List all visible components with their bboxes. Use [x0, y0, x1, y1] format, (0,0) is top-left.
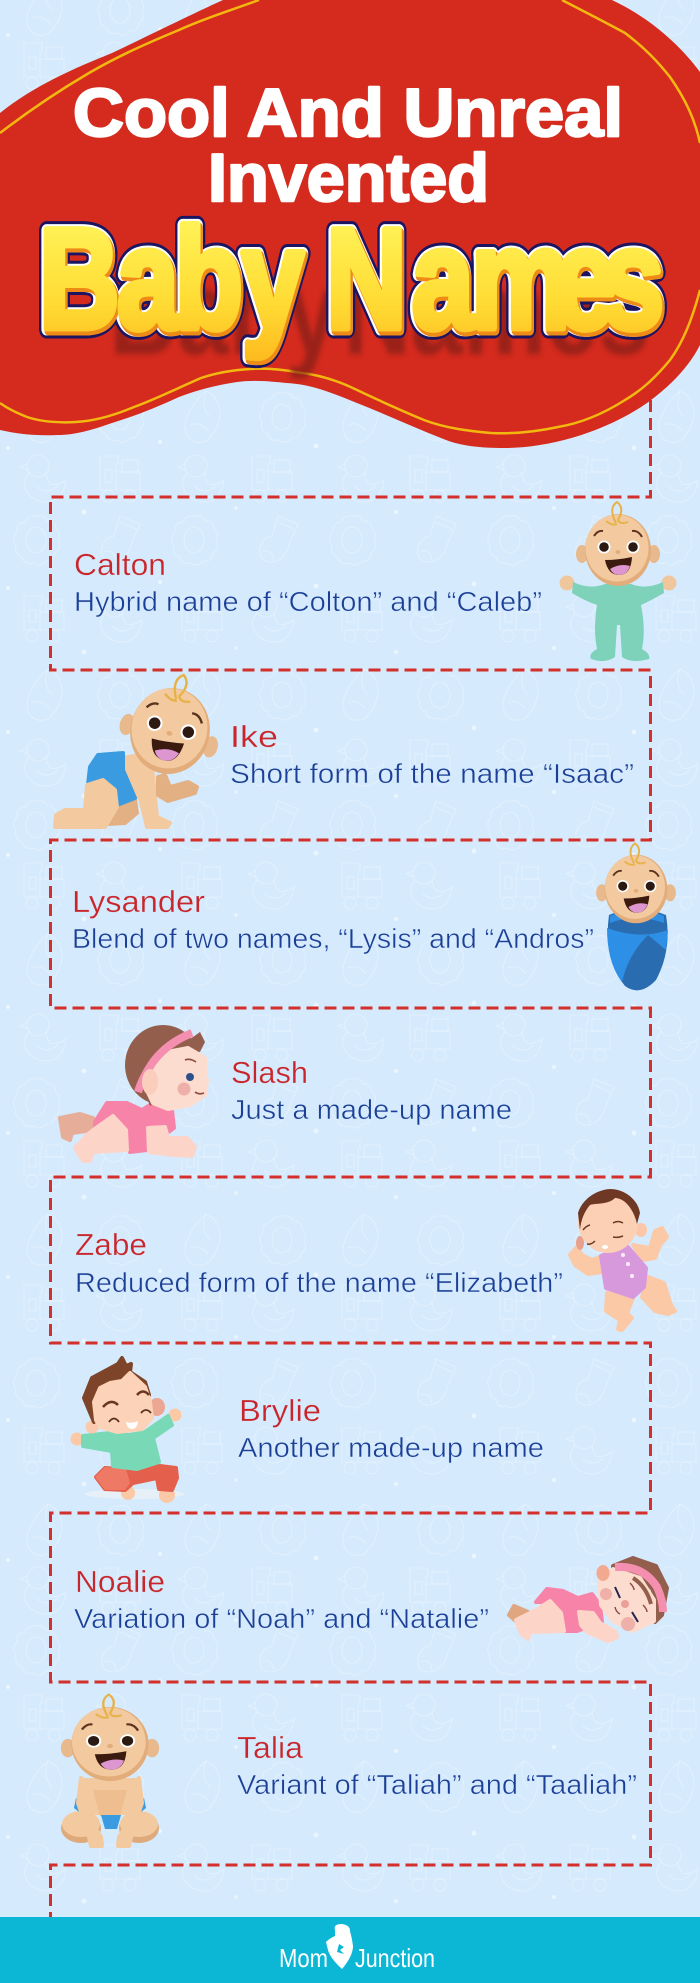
entry: Noalie: Noalie [75, 1564, 165, 1599]
icon: sleeping baby girl in pink [509, 1558, 667, 1641]
footer bar [0, 1917, 700, 1983]
entry: Lysander: Lysander [72, 884, 205, 919]
entry: Calton [74, 547, 542, 617]
title: Baby Names: m [471, 200, 570, 359]
title: Cool And Unreal Invented: Cool And Unreal [73, 75, 623, 151]
title: Baby Names: s [602, 201, 664, 360]
entry: Zabe [75, 1227, 563, 1298]
title: Baby Names: m [471, 201, 570, 360]
title: Baby Names: a [412, 201, 475, 360]
title: Baby Names: N [326, 201, 407, 360]
title: Baby Names: s [602, 201, 664, 360]
title: Baby Names: e [554, 200, 616, 359]
entry: Calton: Hybrid name of “Colton” and “Caleb” [74, 586, 542, 617]
entry: Ike: Ike [230, 719, 278, 754]
title: Baby Names: N [326, 201, 407, 360]
header banner [0, 0, 700, 448]
icon: sitting baby in green top and red pants [70, 1358, 185, 1503]
title: Baby Names: B [41, 203, 121, 362]
title: Baby Names: a [413, 203, 477, 362]
entry: Lysander: Blend of two names, “Lysis” and “Andros” [72, 923, 594, 954]
dashed connector path [50, 400, 650, 1917]
entry: Zabe: Reduced form of the name “Elizabeth” [75, 1267, 563, 1298]
entry: Talia: Talia [237, 1730, 304, 1765]
title: Baby Names: B [39, 201, 120, 360]
title: Cool And Unreal Invented: Invented [208, 140, 489, 216]
title: Baby Names: s [602, 200, 664, 359]
icon: swaddled baby [596, 843, 676, 990]
MomJunction logo: Junction [355, 1943, 435, 1973]
entry: Brylie: Another made-up name [238, 1432, 544, 1463]
title: Cool And Unreal Invented [73, 75, 623, 216]
title: Baby Names: N [326, 200, 407, 359]
title: Baby Names: a [117, 200, 180, 359]
title: Baby Names: b [175, 201, 243, 360]
entry: Slash: Just a made-up name [231, 1094, 512, 1125]
icon: sleeping baby in lilac onesie [570, 1189, 675, 1330]
title: Baby Names: e [555, 203, 617, 362]
entry: Ike [230, 719, 634, 789]
entry: Slash: Slash [231, 1055, 308, 1090]
title: Baby Names: y [242, 200, 304, 359]
title: Baby Names: a [117, 201, 180, 360]
title: Baby Names: y [242, 201, 304, 360]
title: Baby Names: a [412, 200, 475, 359]
title: Baby Names: Baby [109, 246, 338, 380]
icon: standing baby in teal sleeper [560, 502, 676, 661]
MomJunction logo [279, 1924, 435, 1973]
title: Baby Names: a [117, 201, 180, 360]
entry: Ike: Short form of the name “Isaac” [230, 758, 634, 789]
entry: Talia: Variant of “Taliah” and “Taaliah” [237, 1769, 637, 1800]
title: Baby Names: y [242, 201, 304, 360]
title: Baby Names: a [119, 203, 182, 362]
title: Baby Names: B [39, 200, 120, 359]
entry: Calton: Calton [74, 547, 166, 582]
title: Baby Names: Names [343, 246, 650, 380]
title: Baby Names: y [243, 203, 305, 362]
entry: Brylie [238, 1393, 544, 1463]
title: Baby Names: b [175, 200, 243, 359]
icon: sitting baby in blue diaper [61, 1695, 159, 1846]
title: Baby Names: e [554, 201, 616, 360]
title: Baby Names: m [471, 201, 570, 360]
title: Baby Names: b [176, 203, 244, 362]
title: Baby Names [39, 200, 666, 380]
entry: Talia [237, 1730, 637, 1800]
icon: crawling baby girl in pink [60, 1025, 207, 1161]
MomJunction logo: Mom [279, 1943, 328, 1973]
entry: Lysander [72, 884, 594, 954]
title: Baby Names: m [473, 203, 572, 362]
entry: Noalie: Variation of “Noah” and “Natalie” [74, 1603, 489, 1634]
title: Baby Names: e [554, 201, 616, 360]
title: Baby Names: b [175, 201, 243, 360]
icon: crawling baby in blue diaper [55, 662, 234, 827]
entry: Zabe: Zabe [75, 1227, 147, 1262]
title: Baby Names: N [328, 203, 408, 362]
entry: Noalie [74, 1564, 489, 1634]
title: Baby Names: s [604, 203, 666, 362]
entry: Slash [231, 1055, 512, 1125]
title: Baby Names: B [39, 201, 120, 360]
entry: Brylie: Brylie [239, 1393, 321, 1428]
title: Baby Names: a [412, 201, 475, 360]
